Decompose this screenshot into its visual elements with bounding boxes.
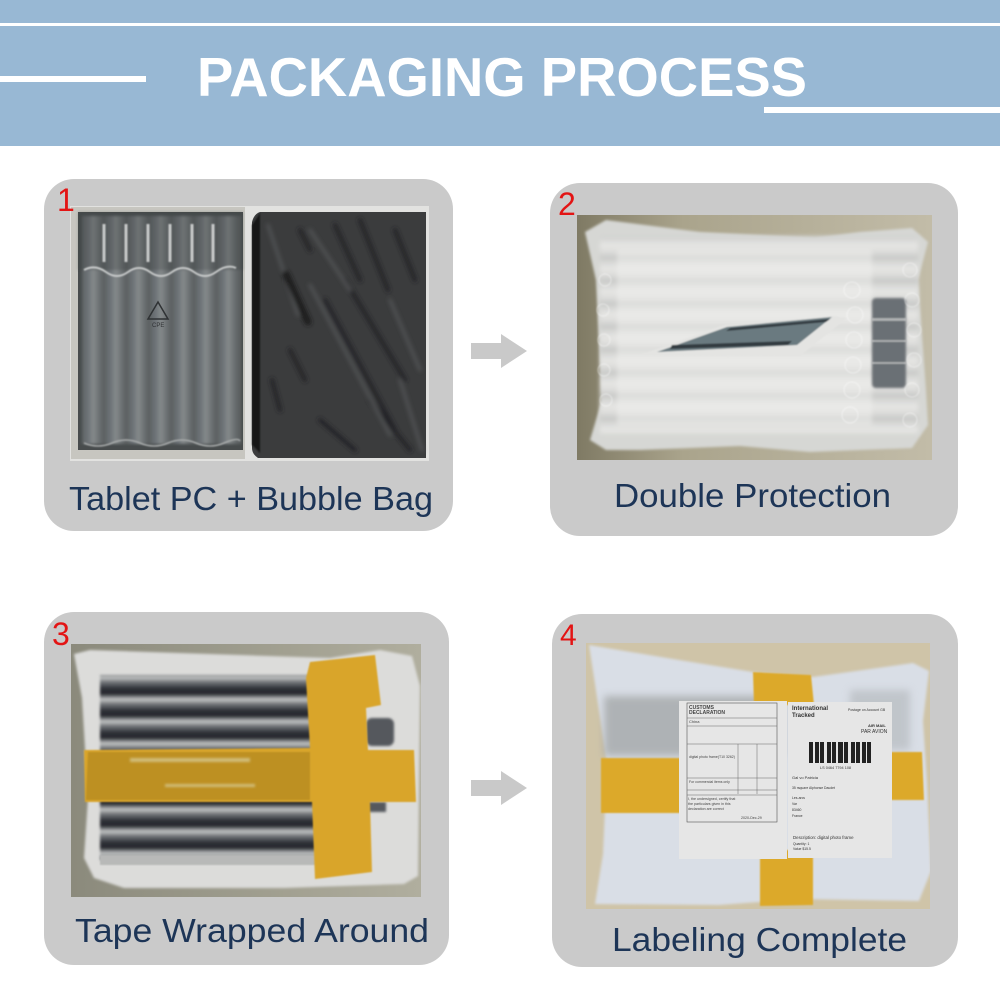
customs declaration label: DECLARATION [689, 710, 725, 716]
customs declaration label: I, the undersigned, certify that [688, 797, 735, 801]
photo: tablet box and bubble bag [70, 206, 429, 461]
customs declaration label: the particulars given in this [688, 802, 731, 806]
shipping label: 83460 [792, 808, 802, 812]
caption: Double Protection [614, 477, 891, 514]
panel: step 4 [552, 614, 958, 967]
yellow tape [84, 655, 416, 879]
shipping label: Gal vo Patricia [792, 775, 819, 780]
customs declaration label: For commercial items only [689, 780, 730, 784]
shipping label: Description: digital photo frame [793, 835, 854, 840]
panel: step 2 [550, 183, 958, 536]
caption: Tape Wrapped Around [75, 912, 429, 949]
customs declaration label: CUSTOMS [689, 705, 715, 711]
step number: 1 [57, 182, 75, 218]
customs declaration label: declaration are correct [688, 807, 724, 811]
header banner [0, 0, 1000, 146]
caption: Tablet PC + Bubble Bag [69, 480, 433, 517]
customs declaration label: China [689, 719, 700, 724]
arrow: step 3 to 4 [471, 771, 527, 805]
recycling mark [148, 302, 168, 329]
photo: labeled parcel [586, 643, 931, 909]
shipping label: France [792, 814, 803, 818]
step number: 4 [560, 619, 577, 652]
tablet on box [658, 316, 832, 352]
shipping label: LS 0464 7794 108 [820, 766, 851, 770]
recycling mark: CPE [152, 323, 164, 329]
shipping label: Value $15.5 [793, 847, 811, 851]
customs declaration label: 2020-Dec-29 [741, 816, 762, 820]
arrow: step 1 to 2 [471, 334, 527, 368]
panel: step 1 [44, 179, 453, 531]
shipping label: AIR MAIL [868, 723, 886, 728]
customs declaration label: digital photo frame(T10 3262) [689, 755, 735, 759]
panel: step 3 [44, 612, 449, 965]
shipping label: Var [792, 802, 798, 806]
shipping label: Quantity: 1 [793, 842, 810, 846]
customs declaration label [679, 701, 787, 859]
shipping label: Tracked [792, 713, 815, 719]
photo: tape wrapped package [71, 644, 421, 897]
caption: Labeling Complete [612, 921, 907, 958]
step number: 3 [52, 616, 70, 652]
photo: double protection bubble wrap [577, 215, 932, 460]
shipping label: International [792, 706, 828, 712]
barcode [809, 742, 871, 763]
shipping label: PAR AVION [861, 729, 888, 735]
shipping label: Les-arcs [792, 796, 805, 800]
title: PACKAGING PROCESS [197, 46, 807, 108]
shipping label: Postage on Account GB [848, 708, 886, 712]
step number: 2 [558, 186, 576, 222]
shipping label [788, 702, 892, 858]
tablet in bag [252, 212, 426, 458]
shipping label: 35 rsquare Alphonse Daudet [792, 786, 835, 790]
